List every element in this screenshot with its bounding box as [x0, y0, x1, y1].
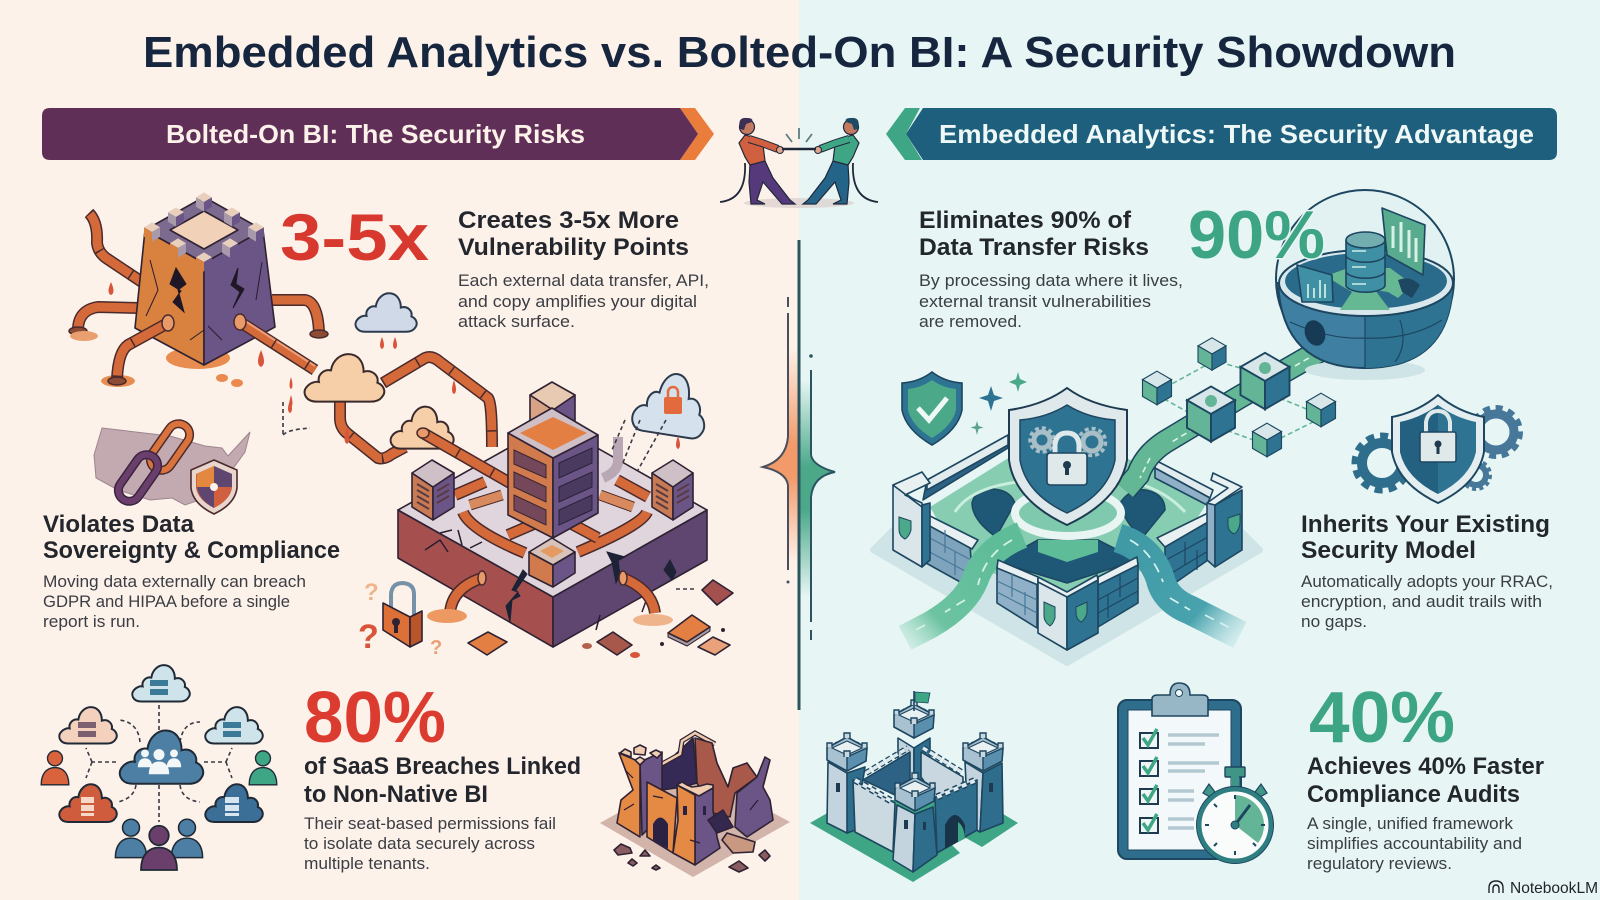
text block: data sovereignty: Moving data externally can breach [43, 572, 306, 591]
back server [530, 382, 575, 460]
ground shadow [873, 530, 1260, 663]
right wall [735, 757, 773, 837]
front walls [853, 780, 977, 853]
walkways on floor [955, 480, 1185, 512]
tenant clouds [59, 665, 263, 822]
peach clouds [305, 354, 454, 449]
icon: shield with check [902, 372, 962, 445]
illustration: leaking pipeline with clouds [283, 354, 492, 458]
text block: compliance audits: A single, unified framework [1307, 814, 1514, 833]
front spouts [450, 571, 655, 613]
icon: clipboard checklist with stopwatch [1118, 683, 1274, 864]
platform cracks [506, 570, 527, 622]
left tower [617, 745, 662, 837]
corner posts [893, 472, 1242, 650]
illustration: cracked tower with leaking pipes [69, 192, 397, 407]
front tower [673, 782, 720, 865]
red wall [695, 738, 757, 817]
text block: data sovereignty: report is run. [43, 612, 140, 631]
text block: SaaS breaches [304, 753, 581, 873]
text block: SaaS breaches: Their seat-based permissions fail [304, 814, 556, 833]
icon: open padlock with question marks: ? [364, 579, 379, 606]
icon: open padlock with question marks: ? [358, 618, 379, 656]
illustration: ruined castle [600, 733, 790, 877]
text block: SaaS breaches: to Non-Native BI [304, 781, 488, 808]
icon: open padlock with question marks [358, 579, 442, 659]
back tower [894, 691, 934, 800]
text block: security model [1301, 511, 1553, 631]
banner: bolted-on BI: Bolted-On BI: The Security Risks [166, 119, 585, 149]
icon: sparkles [970, 372, 1027, 435]
figure: left [720, 118, 795, 204]
connector arrows [86, 672, 232, 822]
text block: vulnerability points: Vulnerability Points [458, 234, 689, 261]
stopwatch [1196, 767, 1274, 864]
puddles [166, 347, 230, 369]
text block: compliance audits: Compliance Audits [1307, 781, 1520, 808]
pits [972, 489, 1165, 537]
illustration: compromised server platform [398, 382, 707, 647]
icon: map with broken chain and shield [94, 419, 250, 514]
text block: data transfer risks: Eliminates 90% of [919, 207, 1132, 234]
text block: security model: Inherits Your Existing [1301, 511, 1550, 538]
platform floor [930, 440, 1207, 600]
banner: bolted-on BI [42, 108, 714, 160]
clash sparks [786, 128, 812, 142]
text block: data sovereignty [43, 511, 340, 631]
text block: data transfer risks: By processing data where it lives, [919, 271, 1183, 290]
front mini server [529, 538, 575, 587]
illustration: multi-tenant cloud network [41, 665, 277, 870]
title: Embedded Analytics vs. Bolted-On BI: A Security Showdown [143, 28, 1456, 77]
text block: vulnerability points: attack surface. [458, 312, 575, 331]
text block: vulnerability points: Each external data transfer, API, [458, 271, 709, 290]
ring under shield [1015, 490, 1121, 536]
text block: security model: encryption, and audit trails with [1301, 592, 1542, 611]
green base [810, 800, 1018, 882]
gears [1355, 408, 1520, 490]
cap [662, 733, 715, 764]
text block: compliance audits [1307, 753, 1544, 873]
icon: cloud with red padlock [612, 368, 710, 470]
background: right advantage panel [799, 0, 1600, 900]
text block: data transfer risks: are removed. [919, 312, 1022, 331]
stat: 80%: 80% [304, 678, 446, 758]
text block: data transfer risks [919, 207, 1183, 331]
text block: data transfer risks: external transit vulnerabilities [919, 292, 1151, 311]
platform block [398, 423, 707, 647]
central server tower [508, 408, 598, 538]
base [600, 770, 790, 877]
text block: compliance audits: regulatory reviews. [1307, 854, 1452, 873]
inner courtyard walls [863, 748, 963, 797]
battlements [144, 192, 264, 272]
checklist rows [1140, 729, 1219, 833]
rope [782, 148, 816, 150]
text block: compliance audits: simplifies accountability and [1307, 834, 1522, 853]
icon: glass globe with database [1276, 190, 1454, 380]
grey pipe [603, 437, 618, 478]
stat: 90%: 90% [1188, 197, 1325, 273]
clip [1152, 683, 1208, 716]
text block: data transfer risks: Data Transfer Risks [919, 234, 1149, 261]
database stack [1346, 232, 1385, 292]
small servers [412, 460, 693, 520]
side towers [827, 733, 1003, 833]
text block: data sovereignty: Sovereignty & Compliance [43, 537, 340, 564]
icon: blockchain style cubes [1142, 338, 1336, 457]
front tower [893, 773, 937, 872]
clipboard board [1118, 700, 1241, 859]
text block: compliance audits: Achieves 40% Faster [1307, 753, 1544, 780]
illustration: secure platform with shield [873, 435, 1260, 663]
text block: SaaS breaches: of SaaS Breaches Linked [304, 753, 581, 780]
brick walls [926, 513, 1208, 583]
center hole [998, 540, 1137, 583]
text block: vulnerability points: Creates 3-5x More [458, 207, 679, 234]
text block: vulnerability points [458, 207, 709, 331]
icon: grey rain cloud [355, 293, 417, 332]
text block: data sovereignty: Violates Data [43, 511, 194, 538]
illustration: intact castle [810, 691, 1018, 882]
front walls [997, 557, 1138, 628]
back wall [662, 738, 697, 790]
users glyph in center cloud [138, 749, 181, 774]
text block: vulnerability points: and copy amplifies your digital [458, 292, 697, 311]
stat: 3-5x: 3-5x [280, 200, 429, 274]
center divider [763, 240, 835, 710]
icon: big shield with padlock [1009, 388, 1127, 525]
watermark: NotebookLM: NotebookLM [1510, 880, 1598, 897]
panels inside globe [1382, 208, 1425, 275]
text block: data sovereignty: GDPR and HIPAA before a single [43, 592, 290, 611]
cloud server glyphs [150, 680, 168, 695]
banner: embedded analytics: Embedded Analytics: The Security Advantage [939, 119, 1534, 149]
text block: SaaS breaches: to isolate data securely across [304, 834, 535, 853]
text block: security model: Security Model [1301, 537, 1476, 564]
icon: scattered debris tiles [468, 580, 733, 658]
text block: security model: no gaps. [1301, 612, 1367, 631]
icon: open padlock with question marks: ? [430, 637, 442, 659]
back walls [923, 435, 1213, 505]
paper [1128, 710, 1231, 850]
green and teal data paths [905, 535, 1240, 638]
stat: 40%: 40% [1309, 678, 1455, 758]
side people [41, 751, 69, 785]
platform pipes [417, 428, 648, 553]
user group [115, 819, 203, 870]
rubble [708, 810, 733, 833]
front pipes [108, 314, 315, 385]
text block: SaaS breaches: multiple tenants. [304, 854, 430, 873]
icon: tug of war figures [720, 118, 878, 208]
pipes behind tower [69, 213, 328, 338]
leak drops [108, 282, 397, 407]
background: left risk panel [0, 0, 799, 900]
figure: right [803, 118, 878, 204]
illustration: data tube to globe [1125, 342, 1335, 490]
tower walls [135, 197, 275, 365]
banner: embedded analytics [886, 108, 1557, 160]
text block: security model: Automatically adopts your RRAC, [1301, 572, 1553, 591]
icon: shield with gears [1355, 395, 1520, 503]
cracks [170, 268, 186, 312]
gate wall [647, 782, 677, 853]
